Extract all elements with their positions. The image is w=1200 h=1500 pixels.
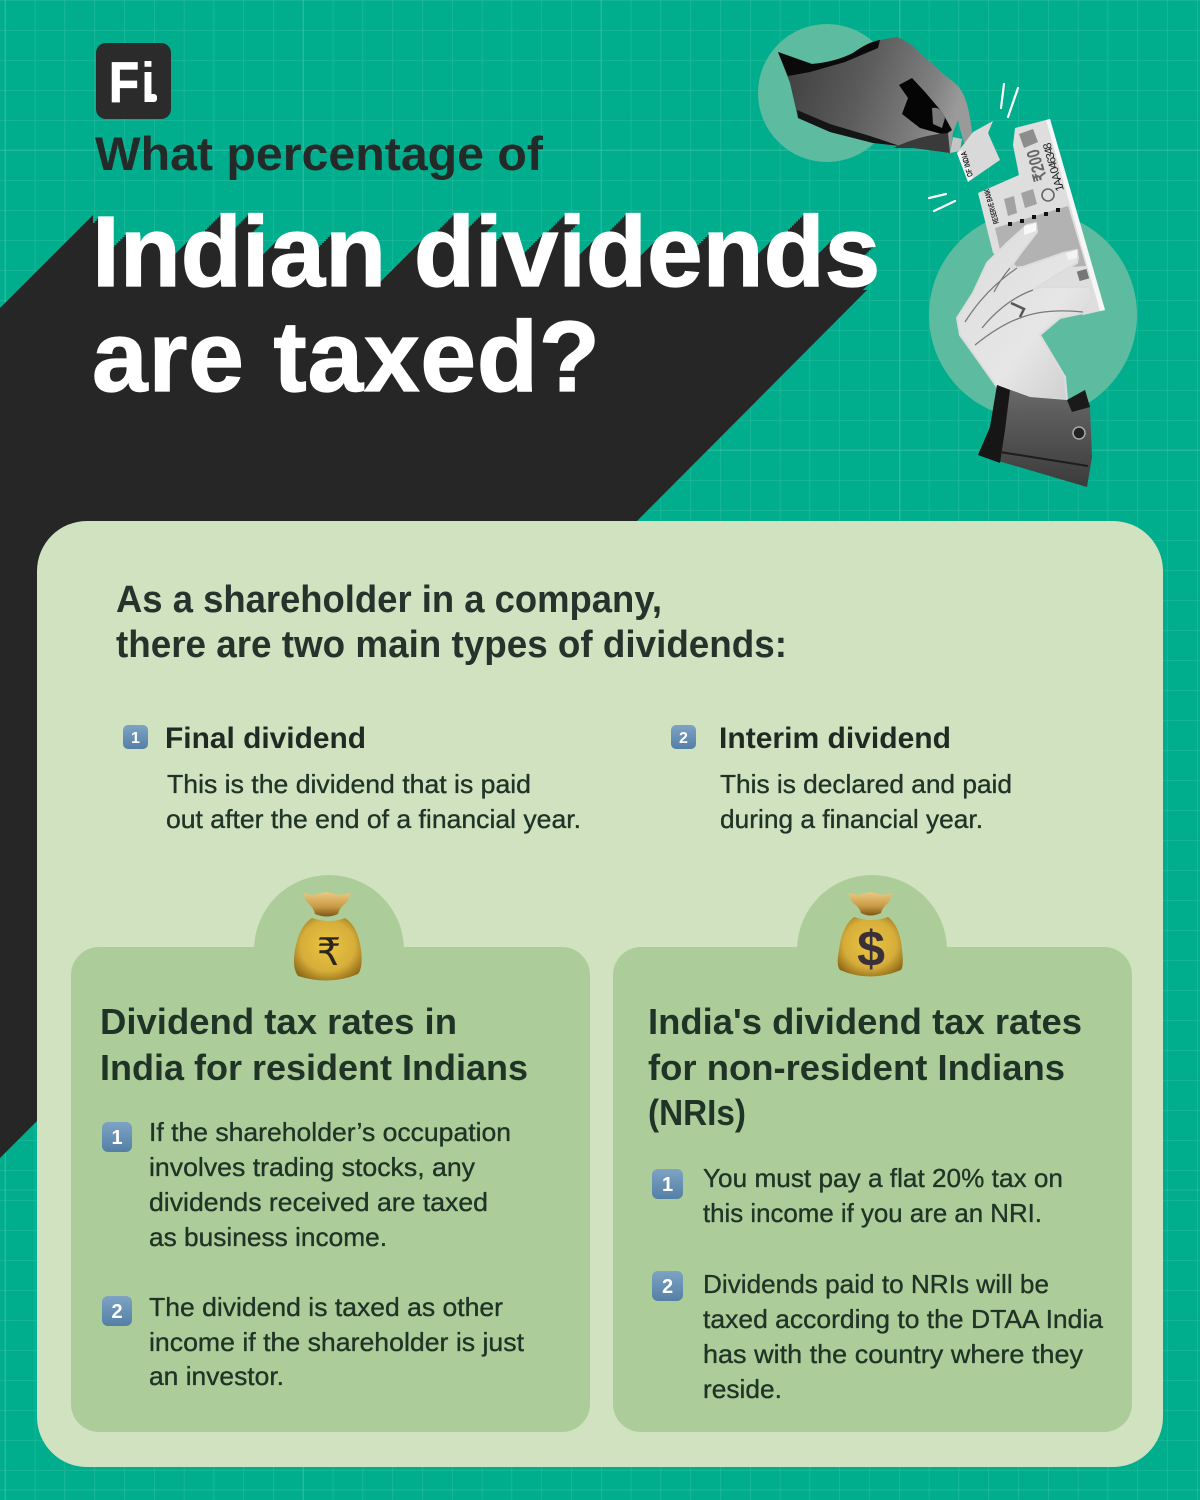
icon: torn banknote corner: OF INDIA xyxy=(959,150,975,178)
intro text: there are two main types of dividends: xyxy=(116,624,787,666)
item: final dividend: out after the end of a financial year. xyxy=(166,804,581,834)
icon: keycap 1: 1 xyxy=(111,1127,123,1149)
point 2 xyxy=(652,1269,1104,1404)
icon: keycap 2: 2 xyxy=(662,1276,673,1298)
icon: keycap 1 xyxy=(102,1122,132,1152)
icon: banknote xyxy=(978,119,1105,315)
point 2: Dividends paid to NRIs will be xyxy=(703,1269,1049,1299)
logo: F xyxy=(109,51,139,115)
heading: Dividend tax rates in xyxy=(100,1001,457,1042)
item: interim dividend: Interim dividend xyxy=(719,722,951,755)
point 2: income if the shareholder is just xyxy=(149,1327,525,1357)
motion ticks xyxy=(929,84,1018,211)
diagonal dark title shadow xyxy=(0,215,867,1158)
point 1: You must pay a flat 20% tax on xyxy=(703,1163,1063,1193)
icon: dollar money bag: $ xyxy=(857,921,885,977)
card: resident Indians xyxy=(71,875,590,1432)
point 1: involves trading stocks, any xyxy=(149,1152,475,1182)
title line 2: are taxed? xyxy=(92,301,601,413)
main panel xyxy=(37,521,1163,1467)
card: non-resident Indians xyxy=(613,875,1132,1432)
icon: lower hand holding banknote xyxy=(957,223,1093,400)
icon: banknote: 1AA 046348 xyxy=(1042,141,1067,192)
intro text: As a shareholder in a company, xyxy=(116,579,662,621)
icon: keycap 2: 2 xyxy=(111,1301,123,1323)
icon: keycap 2 xyxy=(102,1296,132,1326)
intro text xyxy=(116,579,787,666)
icon: keycap 2: 2 xyxy=(679,730,688,747)
icon: rupee money bag xyxy=(294,892,362,981)
icon: keycap 1 xyxy=(652,1169,683,1199)
icon: keycap 1: 1 xyxy=(662,1174,673,1196)
point 2: reside. xyxy=(703,1374,782,1404)
point 2: an investor. xyxy=(149,1361,284,1391)
point 2: taxed according to the DTAA India xyxy=(703,1304,1104,1334)
icon: banknote: ₹200 xyxy=(1023,147,1051,183)
point 1: If the shareholder’s occupation xyxy=(149,1117,511,1147)
card: resident Indians: India for resident Indians xyxy=(100,1047,528,1088)
icon: keycap 2 xyxy=(652,1271,683,1301)
title: Indian dividends are taxed? xyxy=(92,196,880,413)
item: interim dividend: This is declared and paid xyxy=(720,769,1012,799)
subtitle: What percentage of xyxy=(95,127,543,180)
icon: banknote: RESERVE BANK xyxy=(982,188,1001,225)
icon: rupee money bag: ₹ xyxy=(317,932,341,974)
item: final dividend: Final dividend xyxy=(165,722,366,755)
icon: keycap 1 xyxy=(123,725,148,749)
point 1: this income if you are an NRI. xyxy=(703,1198,1042,1228)
icon: keycap 2 xyxy=(671,725,696,749)
point 1: as business income. xyxy=(149,1222,387,1252)
point 1 xyxy=(652,1163,1063,1228)
item: interim dividend: during a financial year. xyxy=(720,804,983,834)
logo xyxy=(96,43,171,119)
icon: dollar money bag xyxy=(838,892,903,977)
icon: keycap 1: 1 xyxy=(131,730,140,747)
circle behind upper hand xyxy=(758,24,896,162)
point 2: The dividend is taxed as other xyxy=(149,1292,503,1322)
card: non-resident Indians: for non-resident Indians xyxy=(648,1047,1065,1088)
item: final dividend: This is the dividend that is paid xyxy=(167,769,531,799)
icon: shirt cuff xyxy=(978,385,1092,487)
title line 1: Indian dividends xyxy=(92,196,880,308)
icon: torn banknote corner xyxy=(957,121,1000,182)
icon: upper hand pinching banknote xyxy=(778,37,973,153)
point 1: dividends received are taxed xyxy=(149,1187,488,1217)
card: non-resident Indians: (NRIs) xyxy=(648,1092,746,1133)
circle behind lower hand xyxy=(929,211,1137,419)
item: interim dividend xyxy=(671,722,1012,834)
item: final dividend xyxy=(123,722,581,834)
point 2: has with the country where they xyxy=(703,1339,1083,1369)
point 1 xyxy=(102,1117,511,1252)
heading: India's dividend tax rates xyxy=(648,1001,1082,1042)
point 2 xyxy=(102,1292,525,1391)
logo: i xyxy=(141,51,155,115)
